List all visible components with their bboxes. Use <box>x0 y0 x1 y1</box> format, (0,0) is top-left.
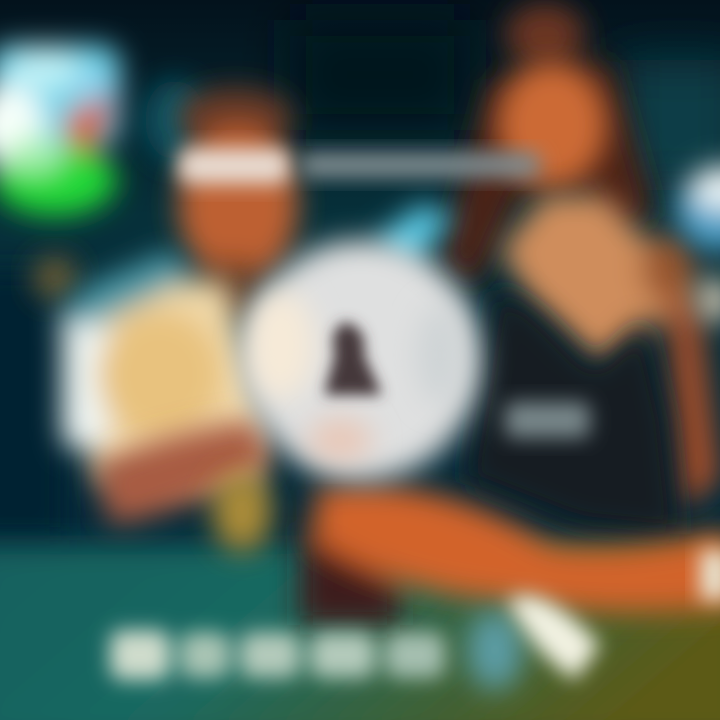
man arm <box>95 420 270 525</box>
man shirt <box>50 250 265 490</box>
floor band <box>0 545 720 720</box>
man lower shirt <box>212 472 272 552</box>
woman legs <box>300 486 720 625</box>
dress label <box>505 402 590 438</box>
man <box>50 88 298 552</box>
woman dark dress <box>465 285 680 535</box>
shoe shadow <box>467 610 523 690</box>
woman <box>300 3 720 690</box>
man hair and head <box>177 88 298 317</box>
wheel warm segments <box>245 290 315 400</box>
bottom caption band <box>110 630 445 680</box>
cyan accent <box>375 205 455 275</box>
white shoe <box>508 595 600 680</box>
right blue icon <box>676 166 720 320</box>
right edge highlight <box>700 550 720 600</box>
woman chest and shoulders <box>500 195 720 510</box>
central wheel <box>244 240 480 480</box>
title text band <box>178 148 540 184</box>
woman hair <box>440 3 655 290</box>
wheel centre figure <box>324 322 382 395</box>
woman face <box>497 63 607 187</box>
icon: colourful app tile <box>0 45 120 216</box>
